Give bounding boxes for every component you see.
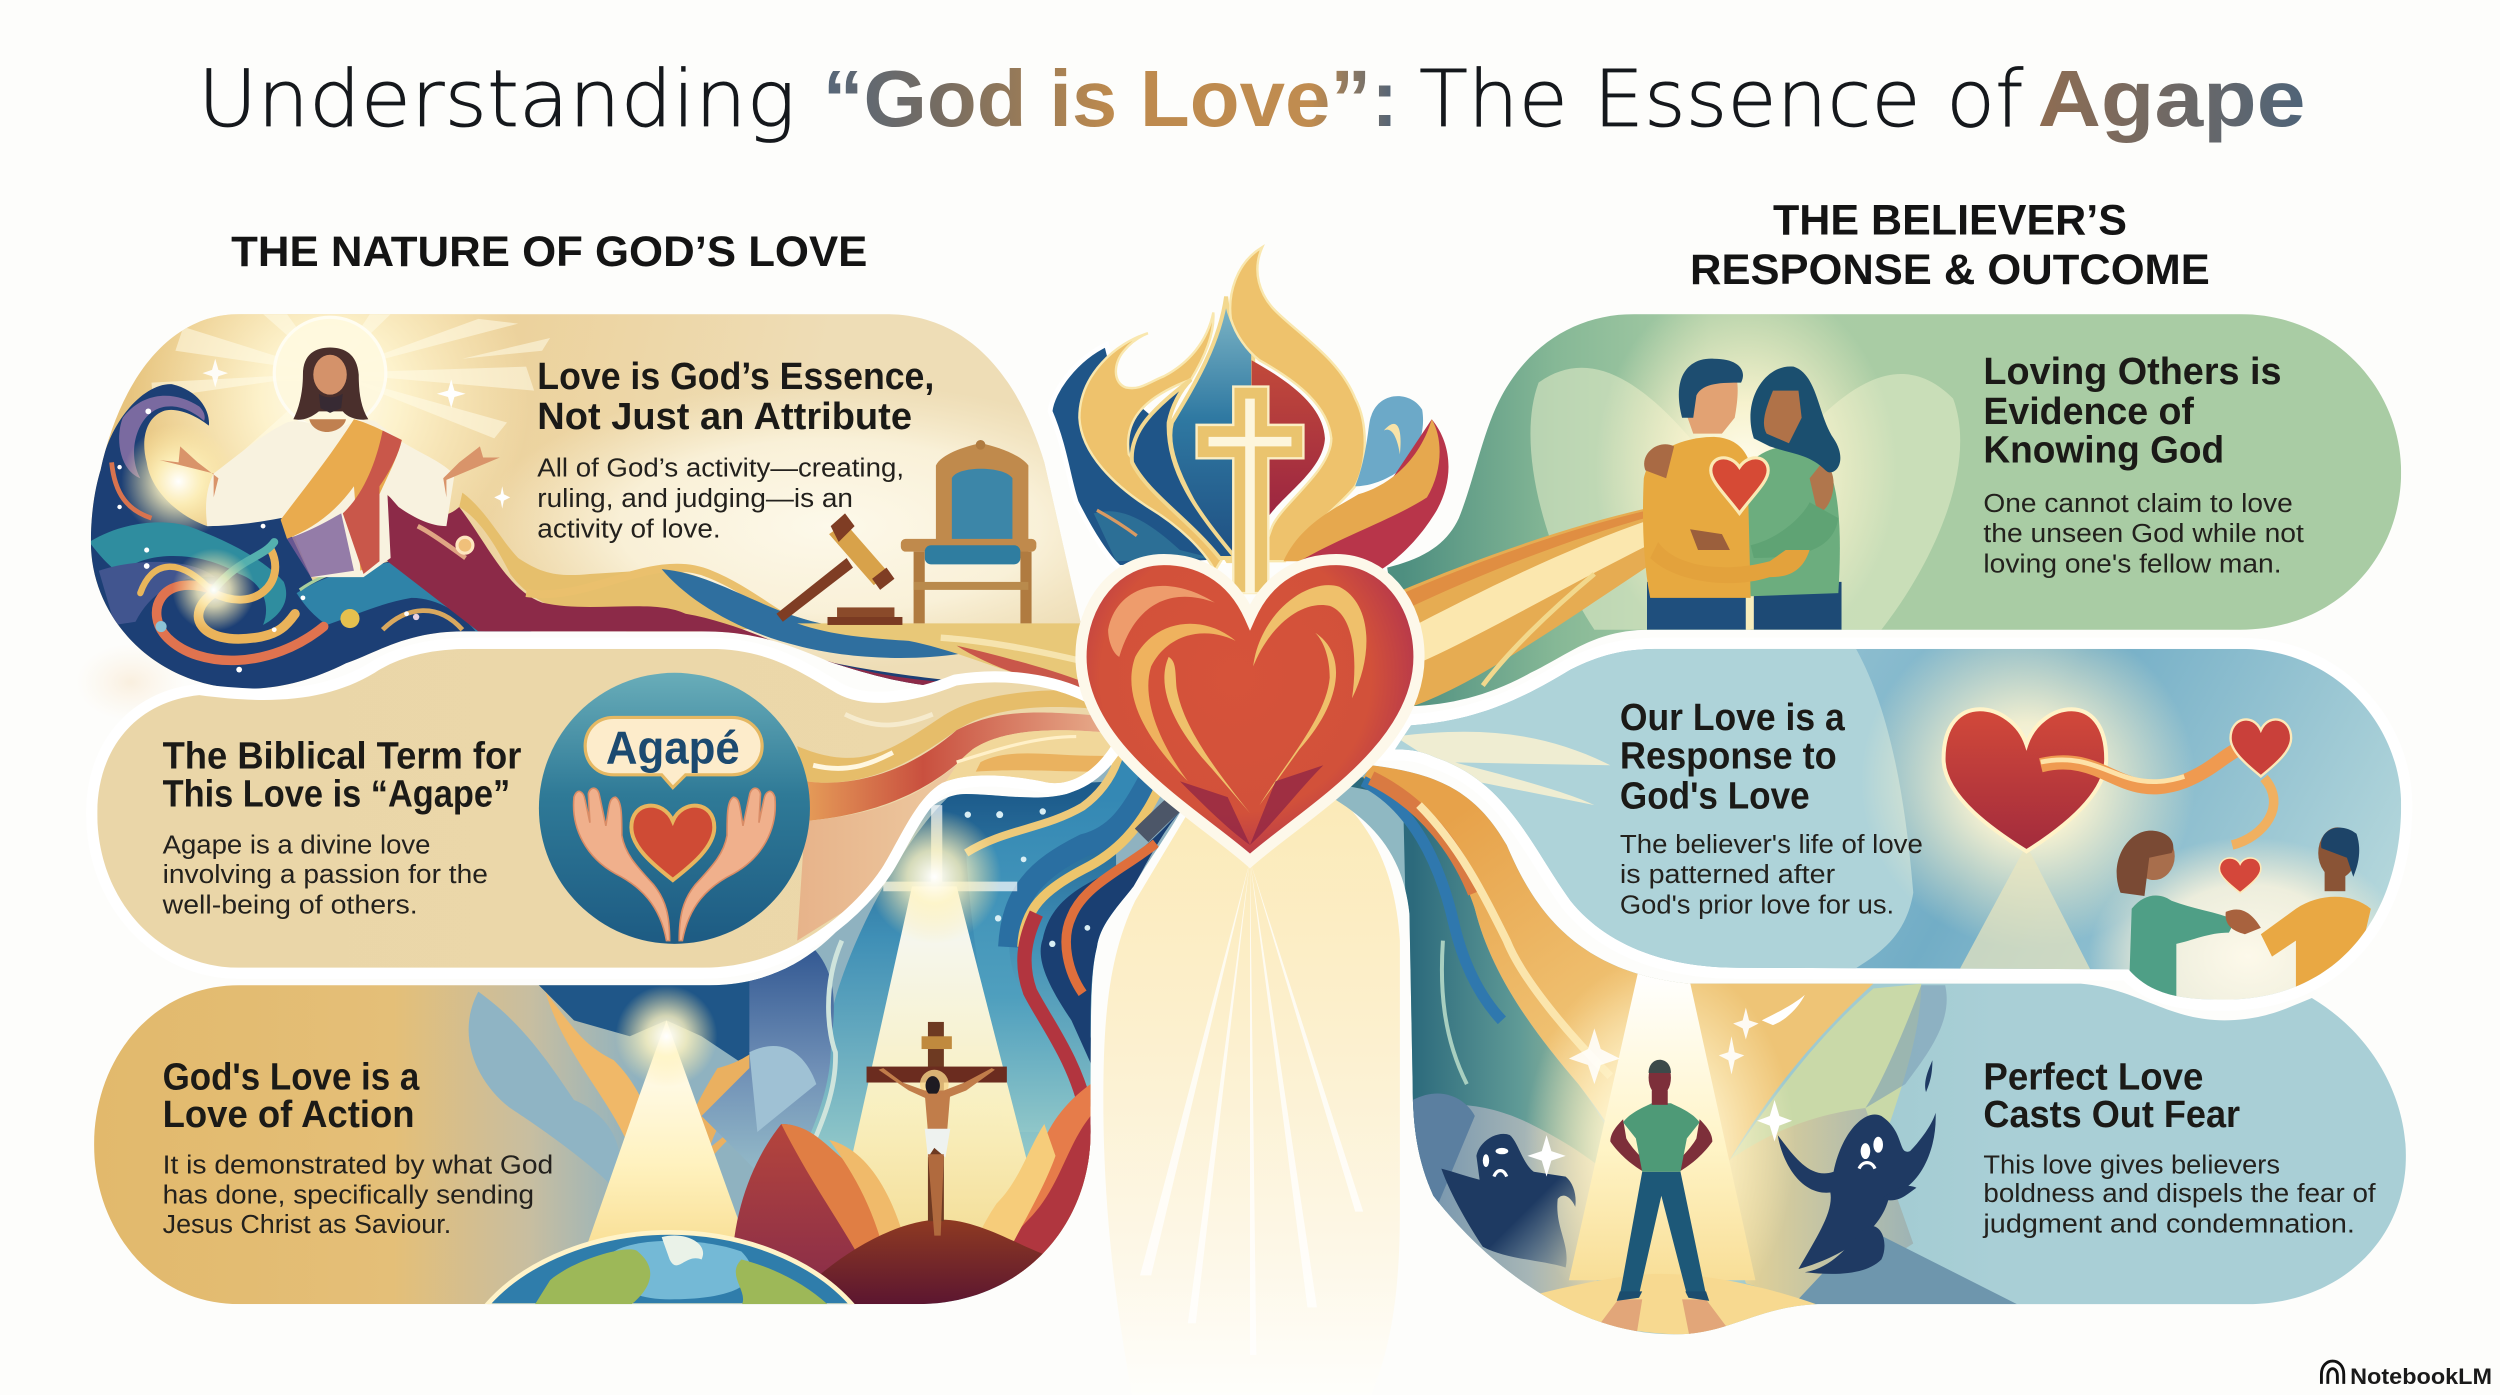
text: essence: Not Just an Attribute [537, 395, 912, 438]
text: essence: activity of love. [537, 513, 721, 543]
ribbon to small heart [2041, 746, 2274, 845]
icon: agape circle [539, 673, 810, 944]
icon: globe [486, 1232, 853, 1306]
title: “God is Love”: [823, 54, 1398, 143]
text: perfect love: Perfect Love [1983, 1056, 2203, 1099]
icon: embracing couple [1643, 359, 1842, 630]
text: agape: well-being of others. [162, 890, 418, 920]
sky right of panel [811, 782, 1116, 1254]
panel: our love is a response [1395, 648, 2401, 1000]
ribbons at the right edge [965, 753, 1183, 1164]
light beam to the heart [1404, 509, 1646, 706]
navy sky and clouds [469, 965, 805, 1188]
text: response: The believer's life of love [1620, 829, 1923, 859]
hill [821, 1220, 1043, 1304]
icon: crucifix [867, 1022, 1007, 1236]
heading: the believer's response and outcome: THE BELIEVER’S [1773, 196, 2127, 244]
text: loving others: One cannot claim to love [1983, 488, 2293, 518]
text: perfect love: boldness and dispels the fear of [1983, 1178, 2376, 1208]
text: agape [162, 734, 521, 920]
icon: throne chair [901, 440, 1036, 623]
text: essence: Love is God’s Essence, [537, 355, 934, 398]
icon: smallest heart [2219, 858, 2261, 893]
panel: loving others [1387, 314, 2401, 706]
speech bubble with the word Agape [585, 717, 762, 788]
text: response: Our Love is a [1620, 696, 1845, 739]
icon: hands holding heart [574, 788, 775, 941]
text: perfect love: This love gives believers [1983, 1149, 2280, 1179]
text: action: Jesus Christ as Saviour. [163, 1209, 451, 1239]
text: action: God's Love is a [163, 1056, 420, 1099]
flame: gold right [1230, 247, 1365, 561]
text: action: has done, specifically sending [163, 1180, 534, 1210]
text: perfect love: judgment and condemnation. [1982, 1208, 2355, 1238]
flame: blue swirl [1355, 396, 1423, 486]
icon: ghost left [1441, 1134, 1576, 1267]
text: response [1620, 696, 1923, 920]
heading: the nature of God's love: THE NATURE OF GOD’S LOVE [231, 228, 867, 276]
icon: flames and cross above the heart [1050, 247, 1449, 593]
flame: orange right [1283, 419, 1440, 561]
ribbons toward heart [797, 690, 1116, 941]
icon: woman and man joining hands [2117, 827, 2371, 1004]
title [198, 54, 2305, 145]
speech bubble with the word Agape: Agapé [606, 722, 740, 774]
panel: God's love is a love of action [80, 753, 1196, 1307]
heading: the believer's response and outcome: RESPONSE & OUTCOME [1690, 246, 2210, 294]
panel: love is God's essence [90, 314, 1080, 689]
text: agape: This Love is “Agape” [163, 773, 510, 816]
icon: small heart [2231, 719, 2291, 776]
flame: gold left [1079, 312, 1228, 571]
icon: central heart [1081, 560, 1419, 861]
beam behind cross [853, 886, 1049, 1258]
text: loving others: the unseen God while not [1983, 518, 2305, 548]
flame: red right [1291, 419, 1449, 571]
text: loving others: Evidence of [1983, 390, 2194, 433]
icon: Jesus figure [159, 348, 500, 577]
text: agape: Agape is a divine love [163, 830, 430, 860]
text: agape: The Biblical Term for [163, 734, 521, 777]
title: Understanding [198, 54, 796, 145]
hill [1523, 1274, 1816, 1335]
text: essence [537, 355, 934, 543]
text: agape: involving a passion for the [163, 859, 488, 889]
text: action: Love of Action [163, 1093, 415, 1136]
panel: the biblical term Agape [80, 638, 1132, 980]
text: perfect love: Casts Out Fear [1983, 1093, 2240, 1136]
text: action: It is demonstrated by what God [163, 1149, 553, 1179]
clouds around hill [734, 1124, 855, 1274]
heading: the believer's response and outcome [1690, 196, 2210, 294]
icon: ghost right [1778, 1113, 1936, 1269]
panel: perfect love casts out fear [1323, 749, 2423, 1347]
flame: central red [1252, 360, 1325, 520]
icon: large glowing heart [1944, 709, 2106, 851]
flowing ribbons [381, 489, 1084, 699]
flame: central blue [1170, 297, 1253, 561]
text: loving others: Knowing God [1983, 428, 2224, 471]
text: loving others: loving one's fellow man. [1983, 548, 2282, 578]
text: response: God's Love [1620, 774, 1810, 817]
central light beam over the globe [588, 1021, 738, 1242]
title: The Essence of [1419, 54, 2024, 145]
stars [202, 359, 510, 509]
icon: small ghost [1805, 1226, 1885, 1274]
text: loving others [1983, 350, 2305, 578]
icon: gavel [776, 513, 902, 625]
center light beam [1103, 797, 1400, 1395]
icon: golden cross [1197, 387, 1303, 593]
text: response: Response to [1620, 734, 1837, 777]
text: loving others: Loving Others is [1983, 350, 2282, 393]
flame: outer blue left [1050, 344, 1228, 568]
flame: mid blue [1132, 379, 1236, 558]
icon: standing man [1610, 1060, 1712, 1301]
text: essence: ruling, and judging—is an [537, 483, 853, 513]
heart swirls [1108, 585, 1366, 845]
galaxy swirl [90, 384, 942, 689]
text: essence: All of God’s activity—creating, [537, 453, 904, 483]
text: action [163, 1056, 553, 1239]
NotebookLM logo: NotebookLM [2350, 1364, 2492, 1389]
ribbons from the heart [1323, 765, 1690, 1299]
soft glow left margin [77, 644, 185, 721]
text: perfect love [1982, 1056, 2376, 1238]
text: response: God's prior love for us. [1620, 890, 1894, 920]
title: Agape [2038, 54, 2305, 143]
text: response: is patterned after [1620, 859, 1835, 889]
